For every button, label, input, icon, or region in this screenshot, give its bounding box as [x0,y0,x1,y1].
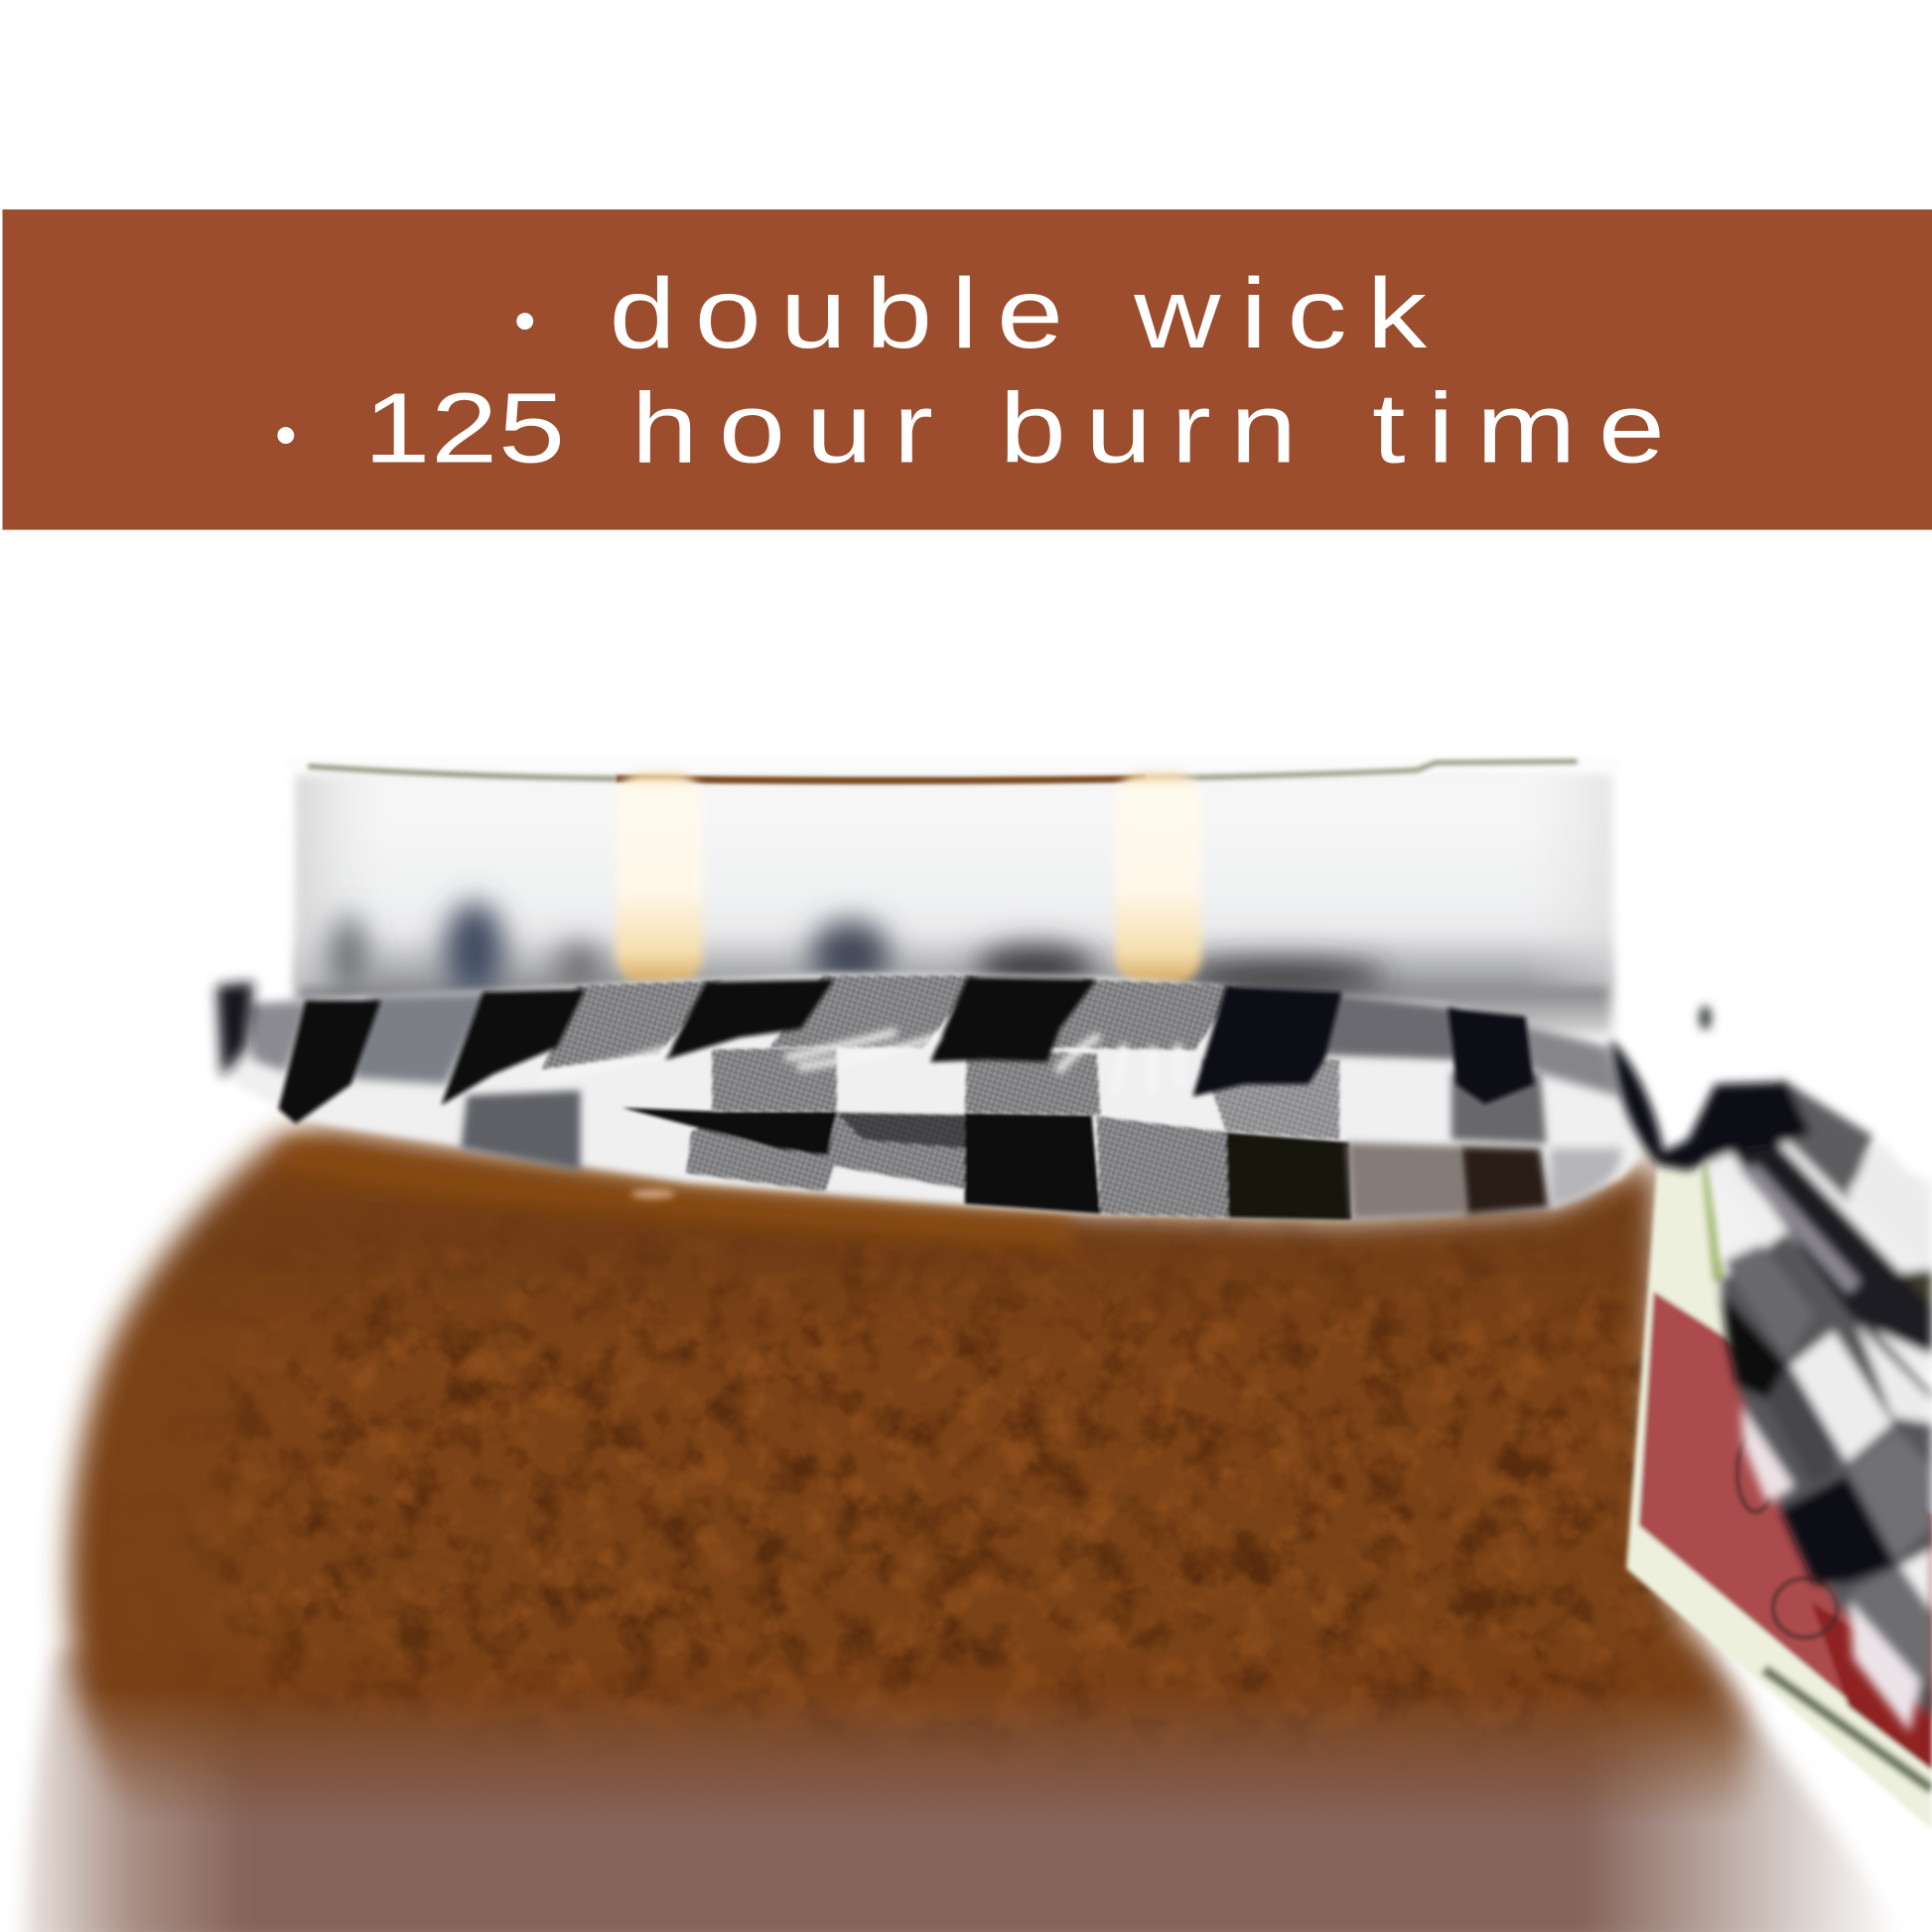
tag green streak [1701,1159,1725,1282]
tail dark base [1721,1232,1932,1719]
tail white patch [1712,1175,1760,1262]
wax mottled texture [189,1220,1706,1731]
tail dark stripe [1731,1140,1932,1355]
bullet: double wick: • [514,287,536,355]
tag red panel [1639,1292,1932,1770]
text: double wick: double [610,257,1082,369]
tail white check [1790,1330,1892,1462]
banner background [2,209,1932,530]
text: 125 hour burn time: hour [631,371,954,483]
tail white base [1707,1109,1932,1380]
ribbon upper woven checks [246,976,1620,1097]
tail black lower [1780,1475,1896,1584]
left flame [617,773,702,983]
tag scribble rings [1737,1433,1837,1637]
upper tail white [1847,1140,1932,1274]
dark reflections in glass [332,901,1386,996]
upper tail dark [1872,1269,1932,1355]
rim highlight [286,759,1620,767]
fringe lower [1850,1600,1920,1732]
candle jar photo [0,761,1932,1932]
dark speckle [189,1225,1658,1731]
light speckle [194,1239,1706,1727]
ribbon lower row [461,1090,1621,1220]
tag print strip [1764,1670,1932,1789]
text: 125 hour burn time: burn [1000,371,1316,483]
gingham ribbon [216,973,1639,1220]
ribbon middle row [712,1047,1547,1144]
ribbon white base [234,973,1639,1217]
glass side shading [296,776,1611,986]
tail gray check right [1847,1428,1932,1560]
text: 125 hour burn time: time [1372,371,1687,483]
knot [1610,1038,1811,1171]
right flame [1115,773,1201,983]
ribbon tails and knot [1610,1006,1932,1732]
tag dark red corner [1811,1601,1932,1770]
rim line right [1146,761,1578,778]
tail dark check [1767,1365,1834,1484]
tail black check [1722,1292,1787,1400]
ribbon frayed fringe [542,1033,1180,1090]
small loose fray [1699,1006,1712,1031]
ribbon black checks [216,977,1534,1124]
text: double wick: wick [1133,257,1447,369]
main wax fade group [0,1128,1747,1849]
bullet: 125 hour burn time: • [275,401,297,470]
tail gray check [1724,1244,1814,1359]
wax line at rim [617,778,1146,780]
lower wax layer [22,1651,1903,1932]
fringe upper [1741,1406,1794,1503]
text: 125 hour burn time: 125 [363,371,566,483]
main wax body [69,1128,1747,1849]
rim line left [308,766,617,778]
feature banner [2,209,1932,530]
wax lip glint [630,1189,675,1199]
wax lip highlight [296,1156,1059,1232]
glass jar neck [286,763,1620,1035]
tail mauve stripe [1739,1165,1861,1294]
hang tag [1626,1154,1932,1830]
tail gray lower [1847,1566,1932,1693]
tail white lower [1900,1549,1932,1611]
tag card [1626,1154,1932,1830]
upper tail gray [1780,1078,1872,1201]
tail white check right [1857,1324,1932,1423]
